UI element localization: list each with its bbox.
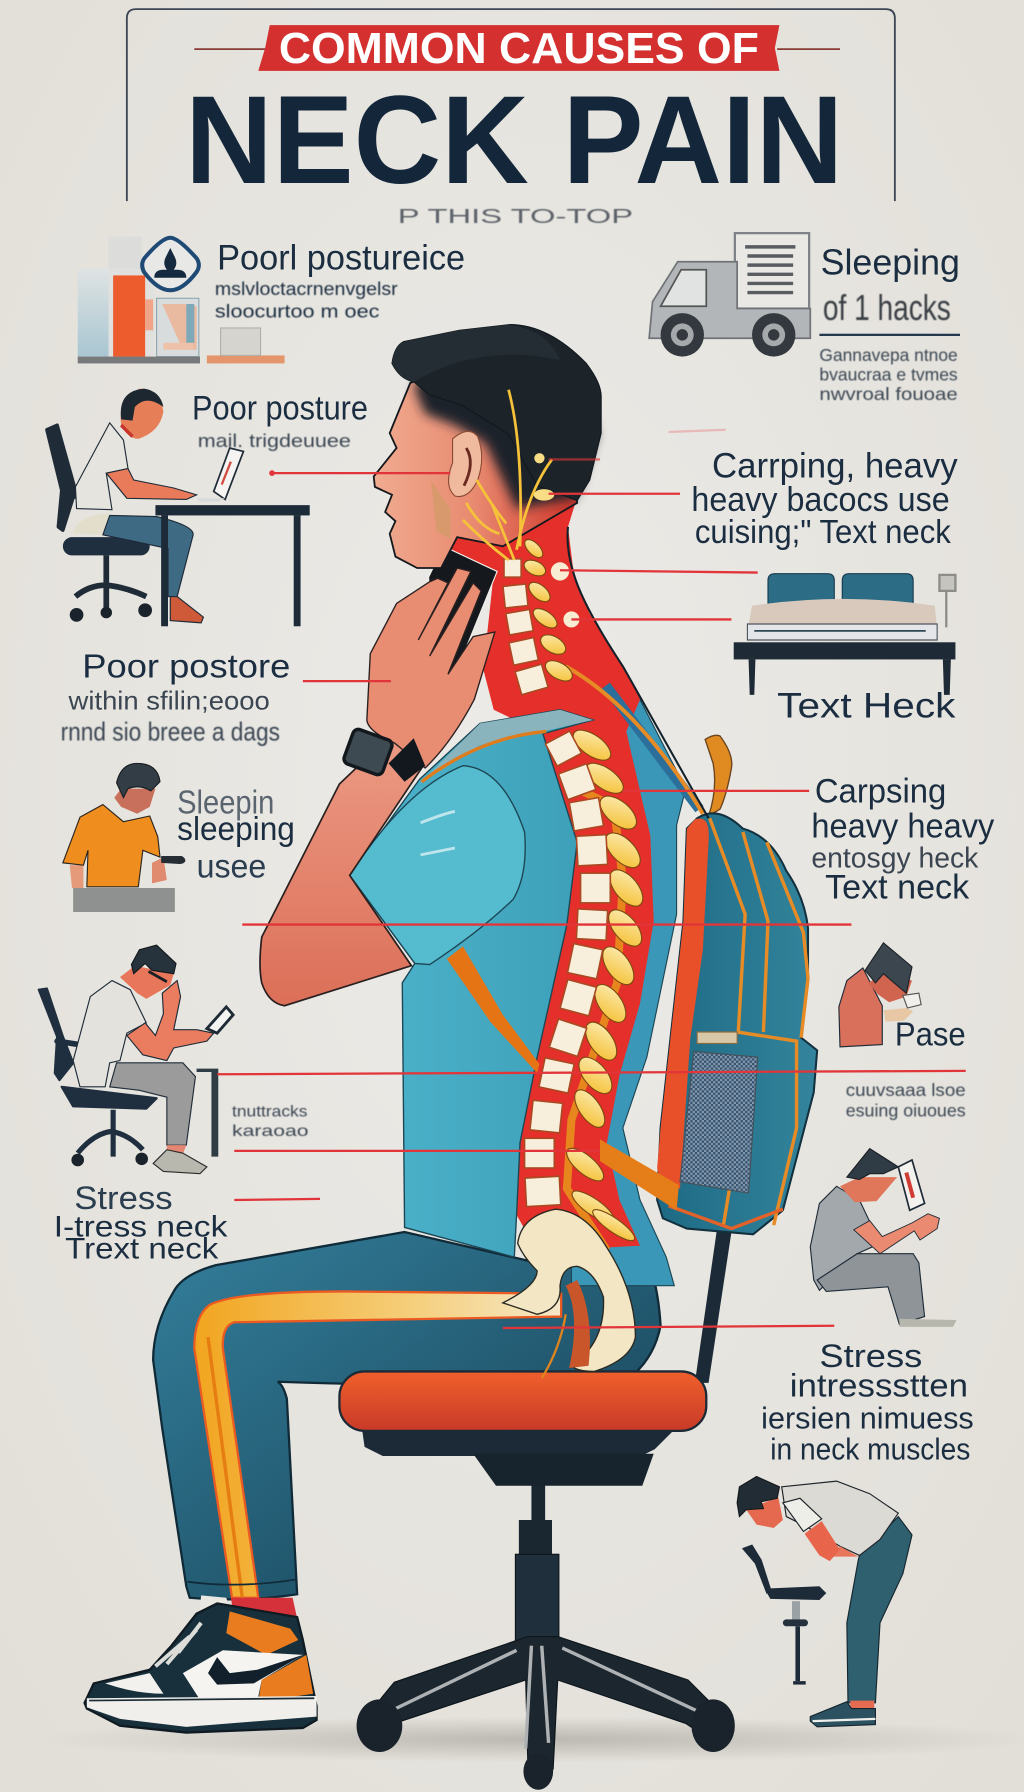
neck strap (566, 527, 709, 818)
spine processes (522, 536, 649, 1250)
text block: poor posture lower: rnnd sio breee a dags (61, 717, 280, 747)
icon: poster display top left (78, 237, 285, 363)
text block: base: Pase (895, 1017, 966, 1054)
sneaker (85, 1595, 317, 1733)
hair quiff (392, 325, 560, 382)
text block: stress tension: Stress (819, 1338, 922, 1374)
text block: sleeping use: sleeping (177, 811, 295, 848)
text block: carrying heavy lower: Text neck (825, 868, 970, 906)
text block: poor posture ice: Poorl postureice (217, 238, 465, 278)
text block: base: esuing oiuoues (846, 1101, 966, 1121)
text block: stress text neck left: Trext neck (65, 1232, 218, 1265)
back outline strip (571, 666, 686, 1286)
text block: poor posture: mail. trigdeuuee (198, 430, 351, 451)
wristwatch (342, 728, 425, 782)
red callout lines (217, 430, 966, 1328)
text block: carrying heavy lower (811, 772, 995, 906)
backpack (657, 735, 817, 1234)
floor shadow (34, 1717, 1024, 1762)
text block: carrying heavy lower: heavy heavy (811, 808, 995, 846)
small garbled caption: tnuttracks (232, 1104, 307, 1121)
jaw band (431, 480, 450, 539)
title: neck pain: NECK PAIN (185, 69, 843, 210)
text block: stress text neck left: Stress (74, 1180, 173, 1216)
title frame (127, 9, 895, 201)
title banner: COMMON CAUSES OF (279, 25, 759, 73)
text block: stress text neck left (54, 1180, 228, 1265)
arm (260, 737, 424, 1006)
small garbled caption: karaoao (232, 1123, 309, 1140)
text block: poor posture ice (215, 238, 465, 322)
text block: poor posture lower: Poor postore (82, 649, 290, 686)
figure: person in orange shirt (63, 763, 185, 912)
text block: poor posture lower: within sfilin;eooo (68, 686, 270, 716)
text block: poor posture (192, 389, 368, 451)
text block: poor posture ice: mslvloctacrnenvgelsr (215, 278, 398, 299)
text block: stress tension: in neck muscles (770, 1431, 970, 1466)
text block: carrying heavy upper: Carrping, heavy (712, 446, 958, 486)
small garbled caption (232, 1104, 309, 1140)
neck and back muscle band (443, 497, 654, 1251)
text block: sleeping on hacks: nwvroal fouoae (819, 384, 958, 404)
t-shirt (350, 710, 679, 1257)
label: text neck right: Text Heck (777, 686, 956, 726)
text block: base: cuuvsaaa lsoe (846, 1080, 966, 1100)
icon: bed (734, 574, 955, 695)
hair (392, 325, 601, 501)
ear (449, 431, 482, 497)
text block: sleeping on hacks: bvaucraa e tvmes (819, 365, 958, 385)
text block: stress text neck left: I-tress neck (54, 1211, 228, 1244)
figure: person with phone on chair (39, 945, 233, 1174)
text block: poor posture: Poor posture (192, 389, 368, 427)
hair fade (414, 354, 597, 509)
pelvis bone (503, 1209, 635, 1378)
text block: poor posture ice: sloocurtoo m oec (215, 301, 379, 322)
text block: sleeping on hacks: Gannavepa ntnoe (819, 345, 958, 365)
text block: base (846, 1017, 966, 1121)
text block: poor posture lower (61, 649, 290, 747)
text block: carrying heavy upper (691, 446, 958, 551)
text block: carrying heavy upper: heavy bacocs use (691, 481, 950, 519)
nerve bundle (463, 390, 552, 560)
face (374, 377, 577, 568)
text block: sleeping use: usee (197, 849, 266, 886)
chair backrest post (695, 1232, 731, 1383)
figure: central seated man with exposed spine (85, 325, 817, 1790)
phone (429, 546, 497, 687)
text block: stress tension: intressstten (790, 1368, 968, 1404)
text block: sleeping on hacks: Sleeping (821, 241, 960, 282)
pants (153, 1232, 661, 1599)
text block: carrying heavy upper: cuising;" Text neck (695, 514, 951, 551)
figure: crouching person with phone (810, 1149, 957, 1327)
text block: carrying heavy lower: entosgy heck (811, 842, 979, 874)
office chair (339, 1371, 735, 1790)
text block: stress tension: iersien nimuess (761, 1401, 974, 1436)
text block: sleeping use: Sleepin (177, 785, 274, 822)
figure: person bending over stool (737, 1477, 912, 1727)
icon: delivery truck (649, 233, 810, 357)
head (374, 325, 601, 627)
leg nerve line (187, 1291, 561, 1598)
subtitle: P THIS TO-TOP (398, 205, 633, 228)
text block: sleeping use (177, 785, 295, 886)
hand (367, 568, 495, 768)
text block: sleeping on hacks (819, 241, 960, 404)
spine vertebrae (503, 559, 610, 1207)
text block: sleeping on hacks: of 1 hacks (823, 287, 951, 328)
figure: person with cup (839, 943, 921, 1047)
text block: stress tension (761, 1338, 974, 1466)
figure: person at laptop (47, 389, 310, 626)
text block: carrying heavy lower: Carpsing (815, 772, 946, 810)
